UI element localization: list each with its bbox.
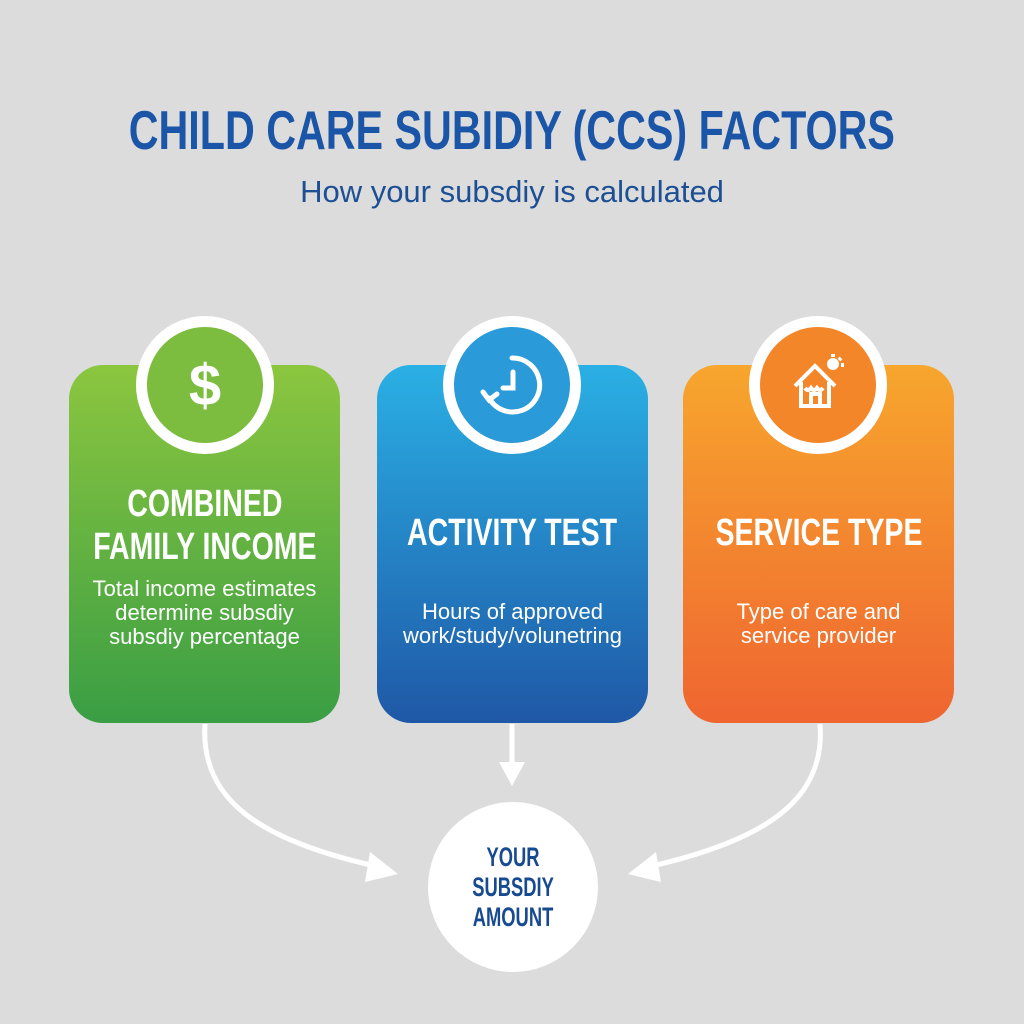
heading: ACTIVITY TEST: [407, 512, 618, 554]
panel: activity test: [377, 365, 648, 723]
description: [403, 599, 622, 648]
description: subsdiy percentage: [109, 624, 300, 649]
icon: dollar: $: [189, 352, 221, 418]
heading: FAMILY INCOME: [93, 526, 316, 568]
icon: clock: [443, 316, 581, 454]
description: work/study/volunetring: [403, 623, 622, 648]
icon: house: [749, 316, 887, 454]
description: [737, 599, 900, 648]
icon: dollar: [136, 316, 274, 454]
subtitle: How your subsdiy is calculated: [300, 174, 724, 209]
result circle: [428, 802, 598, 972]
result circle: YOUR: [486, 842, 540, 872]
heading: [93, 483, 316, 568]
panel: service type: [683, 365, 954, 723]
title: CHILD CARE SUBIDIY (CCS) FACTORS: [129, 99, 895, 161]
description: determine subsdiy: [115, 600, 294, 625]
description: Type of care and: [737, 599, 900, 624]
heading: COMBINED: [127, 483, 282, 525]
panel: combined family income: [69, 365, 340, 723]
result circle: AMOUNT: [473, 902, 553, 932]
heading: SERVICE TYPE: [715, 512, 922, 554]
description: Hours of approved: [422, 599, 603, 624]
description: service provider: [741, 623, 896, 648]
description: Total income estimates: [93, 576, 316, 601]
description: [93, 576, 316, 649]
result circle: SUBSDIY: [472, 872, 554, 902]
